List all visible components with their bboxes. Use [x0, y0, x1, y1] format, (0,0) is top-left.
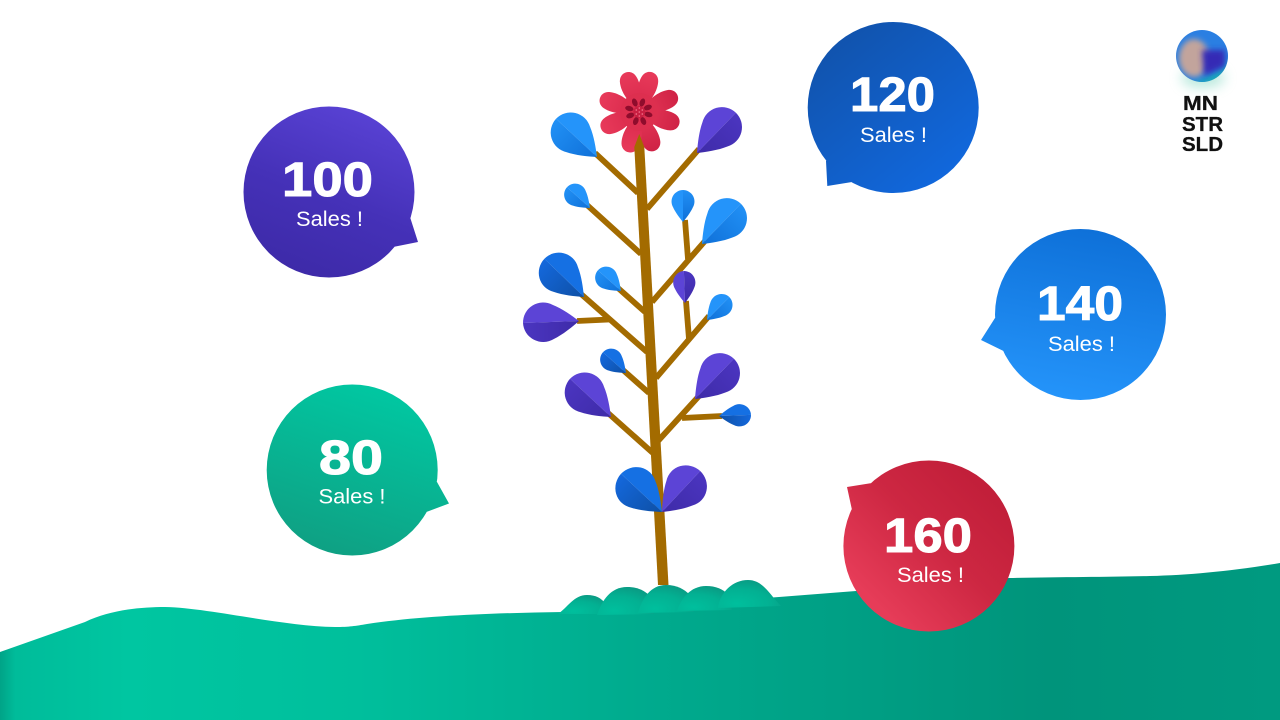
callout: 120 sales: Sales !: [860, 124, 927, 147]
callout: 140 sales: [981, 229, 1166, 400]
plant: [522, 69, 755, 585]
logo wordmark: MN: [1183, 93, 1218, 115]
logo: [1176, 30, 1232, 156]
callout: 140 sales: 140: [1037, 278, 1123, 331]
flower: [597, 69, 682, 155]
leaf 13: [681, 345, 748, 413]
callout: 80 sales: Sales !: [318, 486, 386, 508]
callout: 120 sales: [808, 22, 979, 193]
callout: 80 sales: 80: [319, 432, 383, 485]
leaf 5: [688, 190, 755, 258]
leaf 16: [647, 457, 715, 526]
grass mounds: [558, 580, 781, 615]
ground: [0, 563, 1280, 720]
callout: 160 sales: 160: [884, 510, 972, 563]
callout: 160 sales: [843, 460, 1014, 632]
logo wordmark: [1182, 93, 1224, 156]
leaf 9: [699, 289, 737, 328]
callout: 120 sales: 120: [850, 69, 935, 122]
callout: 100 sales: Sales !: [296, 208, 363, 231]
leaf 3: [560, 179, 597, 216]
leaf 7: [591, 262, 628, 299]
leaf 10: [522, 301, 580, 343]
leaf 12: [556, 364, 625, 432]
callout: 140 sales: Sales !: [1048, 333, 1115, 356]
callout: 100 sales: 100: [282, 154, 373, 207]
callout: 160 sales: Sales !: [897, 564, 964, 587]
stem and branches: [577, 134, 722, 585]
leaf 11: [596, 344, 633, 381]
leaf 15: [607, 459, 676, 527]
leaf 1: [542, 104, 611, 172]
leaf 14: [719, 404, 751, 427]
callout: 80 sales: [267, 384, 449, 556]
leaf 8: [673, 271, 696, 303]
leaf 6: [531, 244, 598, 311]
logo wordmark: SLD: [1182, 134, 1223, 156]
leaf 4: [672, 190, 694, 222]
logo wordmark: STR: [1182, 114, 1224, 136]
leaf 2: [683, 99, 750, 167]
callout: 100 sales: [244, 106, 418, 278]
